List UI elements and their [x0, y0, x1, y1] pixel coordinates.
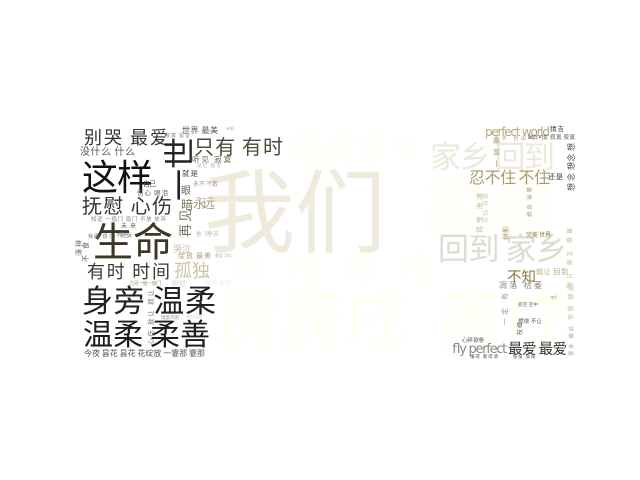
small words: 哭泣 [173, 242, 191, 255]
small words: 默默 [172, 279, 186, 289]
small words: 不食 [81, 242, 91, 262]
small words: 知道 一扇门 扇门 不放 放弃 [91, 215, 166, 223]
small words: 想念 想 [566, 143, 577, 170]
pale background words: 庚 [438, 269, 502, 361]
small words: 孤独 [174, 257, 210, 283]
word: 今夜 昙花: 今夜 昙花 昙花 花绽放 一霎那 霎那 [84, 348, 205, 359]
word: 别哭 最爱: 别哭 最爱 [84, 124, 168, 150]
small words: 一树影 [492, 137, 502, 167]
word: 温柔 柔善: 温柔 柔善 [83, 310, 210, 354]
small words: 就是 [182, 168, 198, 179]
right cluster [430, 123, 577, 360]
small words: 记忆 留音 [197, 162, 222, 169]
small words: 听见 寂寞 [192, 154, 232, 165]
small words: 慢慢 风雨 [161, 314, 180, 321]
small words: 不要 告诉 [116, 232, 132, 239]
small words: 年华 [550, 294, 557, 301]
word: 一世: 一世 [155, 137, 201, 201]
small words [462, 123, 577, 360]
small words: 心碎 欲卷 [462, 336, 484, 344]
small words: 凋落 枯萎 [499, 280, 542, 291]
small words: 眼 [181, 182, 191, 197]
small words: 永不 不散 [193, 179, 218, 188]
pale background words: 庚 [280, 269, 344, 361]
small words: 完美 世界 [526, 230, 551, 239]
pale background words: 寂寞 [422, 158, 557, 248]
small words: 自己 [143, 179, 156, 189]
pale background words: 房 [218, 269, 282, 361]
small words: 之间 一扇 一扇门 [129, 280, 161, 287]
small words: 黄昏 文案 只能 [565, 228, 574, 288]
word: 回到 家乡: 回到 家乡 [438, 224, 567, 269]
left cluster [73, 124, 283, 359]
small words: 伤心 眼泪 [137, 187, 168, 197]
small words: 世界 自由 [494, 135, 526, 142]
small words: 世界 最美 [182, 125, 218, 136]
small words: 未来 [121, 221, 136, 230]
pale background words: 戌 [505, 269, 569, 361]
small words: 枝桠 [515, 322, 524, 335]
pale background words [218, 124, 569, 361]
small words [73, 125, 234, 345]
word: 家乡 回到: 家乡 回到 [430, 132, 555, 177]
small words: 不约 而同 [186, 313, 202, 320]
small words: 幽旧 可爱 [528, 134, 548, 141]
small words: 慢慢 慢慢 [513, 353, 535, 360]
small words: 我跟 很久 [88, 233, 114, 240]
small words: 想念 [566, 173, 577, 191]
small words: 绽放 最美 [178, 251, 211, 261]
word: fly perfect: fly perfect [452, 342, 507, 357]
small words: 时间 能够 [205, 278, 231, 287]
small words: 你我 彼此 [566, 285, 575, 320]
small words: 黄昏 陪伴 [481, 193, 490, 223]
small words: 燃烧 不让 [518, 317, 542, 325]
pale background words: 房戌房戌 [232, 241, 432, 290]
small words: 今天 [207, 229, 219, 238]
small words: 最爱 可知 [215, 252, 231, 259]
small words: 一定 有 [500, 293, 510, 325]
word: 有时 时间: 有时 时间 [87, 258, 170, 284]
small words: 树影 [73, 240, 83, 256]
small words: 懂得 看得清 [470, 353, 498, 360]
word: 没什么 什么: 没什么 什么 [80, 143, 135, 158]
word: 身旁 温柔: 身旁 温柔 [82, 276, 216, 321]
small words: 最美 琴键 [525, 187, 533, 217]
word: 这样: 这样 [82, 149, 153, 201]
word: 还是: 还是 [548, 172, 563, 182]
small words: 猜吉 [550, 123, 564, 133]
small words: 很多 彼此 [568, 326, 575, 356]
small words: 摇曳 海滩 [475, 193, 485, 233]
small words: 再见 [175, 209, 194, 237]
small words: 寺吧 [226, 125, 234, 132]
word: 不知: 不知 [507, 266, 536, 287]
word: 抚慰 心伤: 抚慰 心伤 [82, 190, 172, 219]
small words: 树影 [501, 226, 511, 240]
small words: 暗 [181, 196, 193, 213]
small words: 寂寞 留音 [165, 132, 190, 139]
small words: 心伤 放让 就让 [145, 290, 155, 345]
small words: 永远 [193, 193, 215, 212]
small words: 看到 [196, 230, 210, 238]
pale background words: 回到家乡 [290, 124, 420, 170]
word: perfect world: perfect world [485, 125, 550, 139]
word: 最爱 最爱: 最爱 最爱 [508, 338, 567, 359]
word: 只有 有时: 只有 有时 [194, 131, 283, 160]
pale background words: 戌 [345, 269, 409, 361]
word: 我们: 我们 [204, 140, 386, 272]
small words: 寂寞 寂寞 [550, 133, 575, 141]
word: 生命: 生命 [93, 210, 173, 268]
word: 忍不住 不住: 忍不住 不住 [469, 164, 550, 188]
small words: 寂空 空中 [518, 301, 538, 308]
small words: 就让 回到 [536, 267, 568, 277]
